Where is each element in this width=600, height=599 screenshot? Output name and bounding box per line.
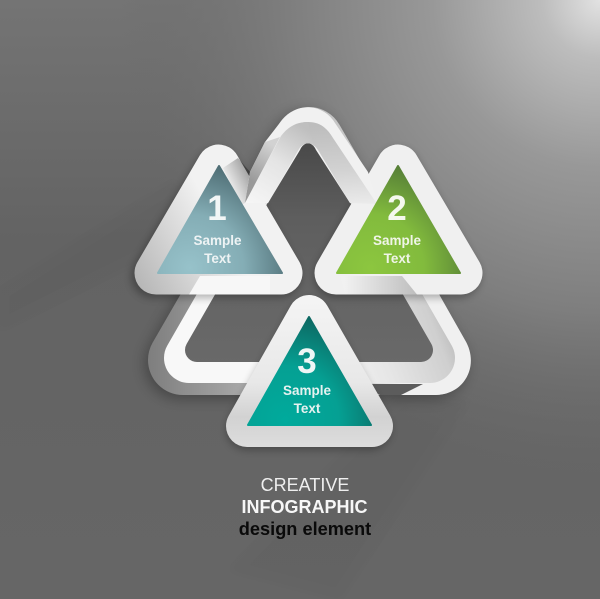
triangle 1 content xyxy=(158,166,282,273)
frame 1 cast shade xyxy=(223,158,250,205)
label 1: Sample xyxy=(193,233,242,248)
label 3: Text xyxy=(294,401,321,416)
panel: triangle 3 xyxy=(247,316,372,426)
arch white outer band xyxy=(245,107,378,204)
panel: triangle 1 xyxy=(156,158,281,294)
label 3: Sample xyxy=(283,383,331,398)
frame shadows xyxy=(153,170,459,429)
ring drop shadow xyxy=(180,146,432,364)
arch left grey sliver xyxy=(245,137,280,203)
ring hole xyxy=(197,155,421,350)
triangle 3 fill xyxy=(248,317,371,425)
arch left light band xyxy=(245,122,314,203)
ring inner band xyxy=(189,148,430,358)
number 1: 1 xyxy=(207,189,227,228)
frame 2 xyxy=(336,166,461,273)
panel: triangle 2 xyxy=(336,166,461,294)
ring outer band xyxy=(183,142,435,360)
triangle 2 content xyxy=(337,166,460,273)
number 3: 3 xyxy=(297,342,317,381)
long diagonal shadows xyxy=(0,180,470,599)
frame 2 lower shade xyxy=(340,276,417,294)
title: INFOGRAPHIC xyxy=(242,497,368,517)
label 1: Text xyxy=(204,251,231,266)
frame 3 xyxy=(247,316,372,426)
ring top arch xyxy=(245,107,378,204)
frame 1 xyxy=(156,166,281,273)
triangle 2 fill xyxy=(337,166,460,273)
label 2: Text xyxy=(384,251,411,266)
ring band passing over frame 1 xyxy=(189,276,270,294)
triangle 1 fill xyxy=(158,166,282,273)
ring outer band right side xyxy=(355,190,471,395)
number 2: 2 xyxy=(387,189,407,228)
title: CREATIVE xyxy=(261,475,349,495)
ribbon ring xyxy=(183,142,471,395)
arch right grey band xyxy=(288,122,377,204)
label 2: Sample xyxy=(373,233,421,248)
wedge below inner band xyxy=(353,384,423,395)
title xyxy=(239,475,371,539)
title: design element xyxy=(239,519,371,539)
